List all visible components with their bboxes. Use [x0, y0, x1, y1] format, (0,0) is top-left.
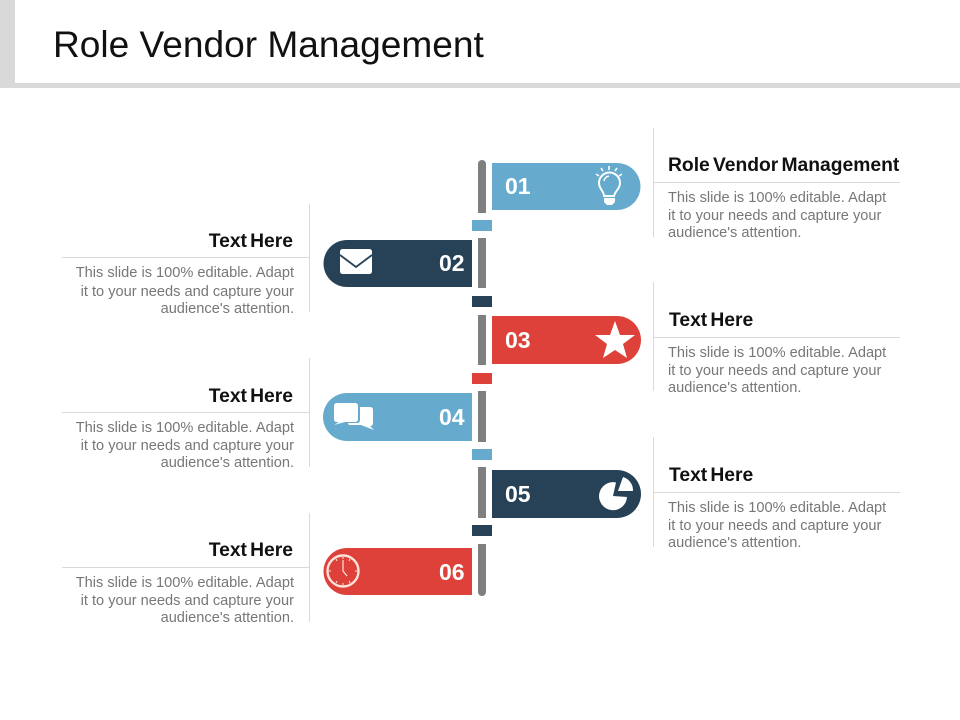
step 01 pill: 01 — [505, 173, 531, 199]
step 06 pill: 06 — [439, 559, 465, 585]
icon: star — [595, 321, 635, 358]
step 06 pill — [324, 548, 472, 595]
text block 03: audience's attention. — [668, 380, 801, 396]
text block 05: This slide is 100% editable. Adapt — [668, 500, 886, 516]
text block 06 — [62, 513, 310, 626]
text block 02: it to your needs and capture your — [81, 284, 294, 300]
text block 01: audience's attention. — [668, 225, 801, 241]
text block 03: it to your needs and capture your — [668, 363, 882, 379]
text block 02: This slide is 100% editable. Adapt — [76, 265, 294, 281]
text block 02 — [62, 204, 310, 317]
icon: envelope — [340, 249, 372, 274]
text block 06: This slide is 100% editable. Adapt — [76, 575, 294, 591]
text block 04: it to your needs and capture your — [81, 438, 294, 454]
text block 01: This slide is 100% editable. Adapt — [668, 190, 886, 206]
header band — [0, 0, 960, 88]
text block 04: Text Here — [209, 386, 293, 407]
text block 04 — [62, 358, 310, 471]
step 03 pill — [492, 316, 641, 364]
text block 02: audience's attention. — [161, 301, 294, 317]
step 01 pill — [492, 163, 640, 210]
text block 04: audience's attention. — [161, 455, 294, 471]
step 02 pill — [324, 240, 472, 287]
icon: clock — [328, 556, 358, 586]
text block 06: it to your needs and capture your — [81, 593, 294, 609]
text block 03: Text Here — [669, 310, 754, 331]
text block 01: it to your needs and capture your — [668, 208, 882, 224]
step 04 pill: 04 — [439, 404, 465, 430]
title: Role Vendor Management — [53, 23, 484, 65]
step 04 pill — [323, 393, 472, 441]
text block 05: Text Here — [669, 465, 754, 486]
step 03 pill: 03 — [505, 327, 531, 353]
text block 02: Text Here — [209, 231, 293, 252]
text block 05: audience's attention. — [668, 535, 801, 551]
icon: pie chart — [599, 477, 633, 510]
text block 05: it to your needs and capture your — [668, 518, 882, 534]
text block 03: This slide is 100% editable. Adapt — [668, 345, 886, 361]
text block 05 — [653, 437, 900, 551]
step 05 pill — [492, 470, 641, 518]
text block 04: This slide is 100% editable. Adapt — [76, 420, 294, 436]
text block 03 — [653, 282, 900, 396]
step 02 pill: 02 — [439, 250, 465, 276]
text block 01: Role Vendor Management — [668, 155, 900, 176]
text block 06: audience's attention. — [161, 610, 294, 626]
text block 01 — [653, 128, 900, 241]
timeline spine — [478, 160, 486, 596]
icon: light bulb — [596, 166, 622, 205]
timeline markers — [472, 220, 492, 536]
icon: speech bubbles — [334, 403, 374, 430]
text block 06: Text Here — [209, 540, 293, 561]
step 05 pill: 05 — [505, 481, 531, 507]
